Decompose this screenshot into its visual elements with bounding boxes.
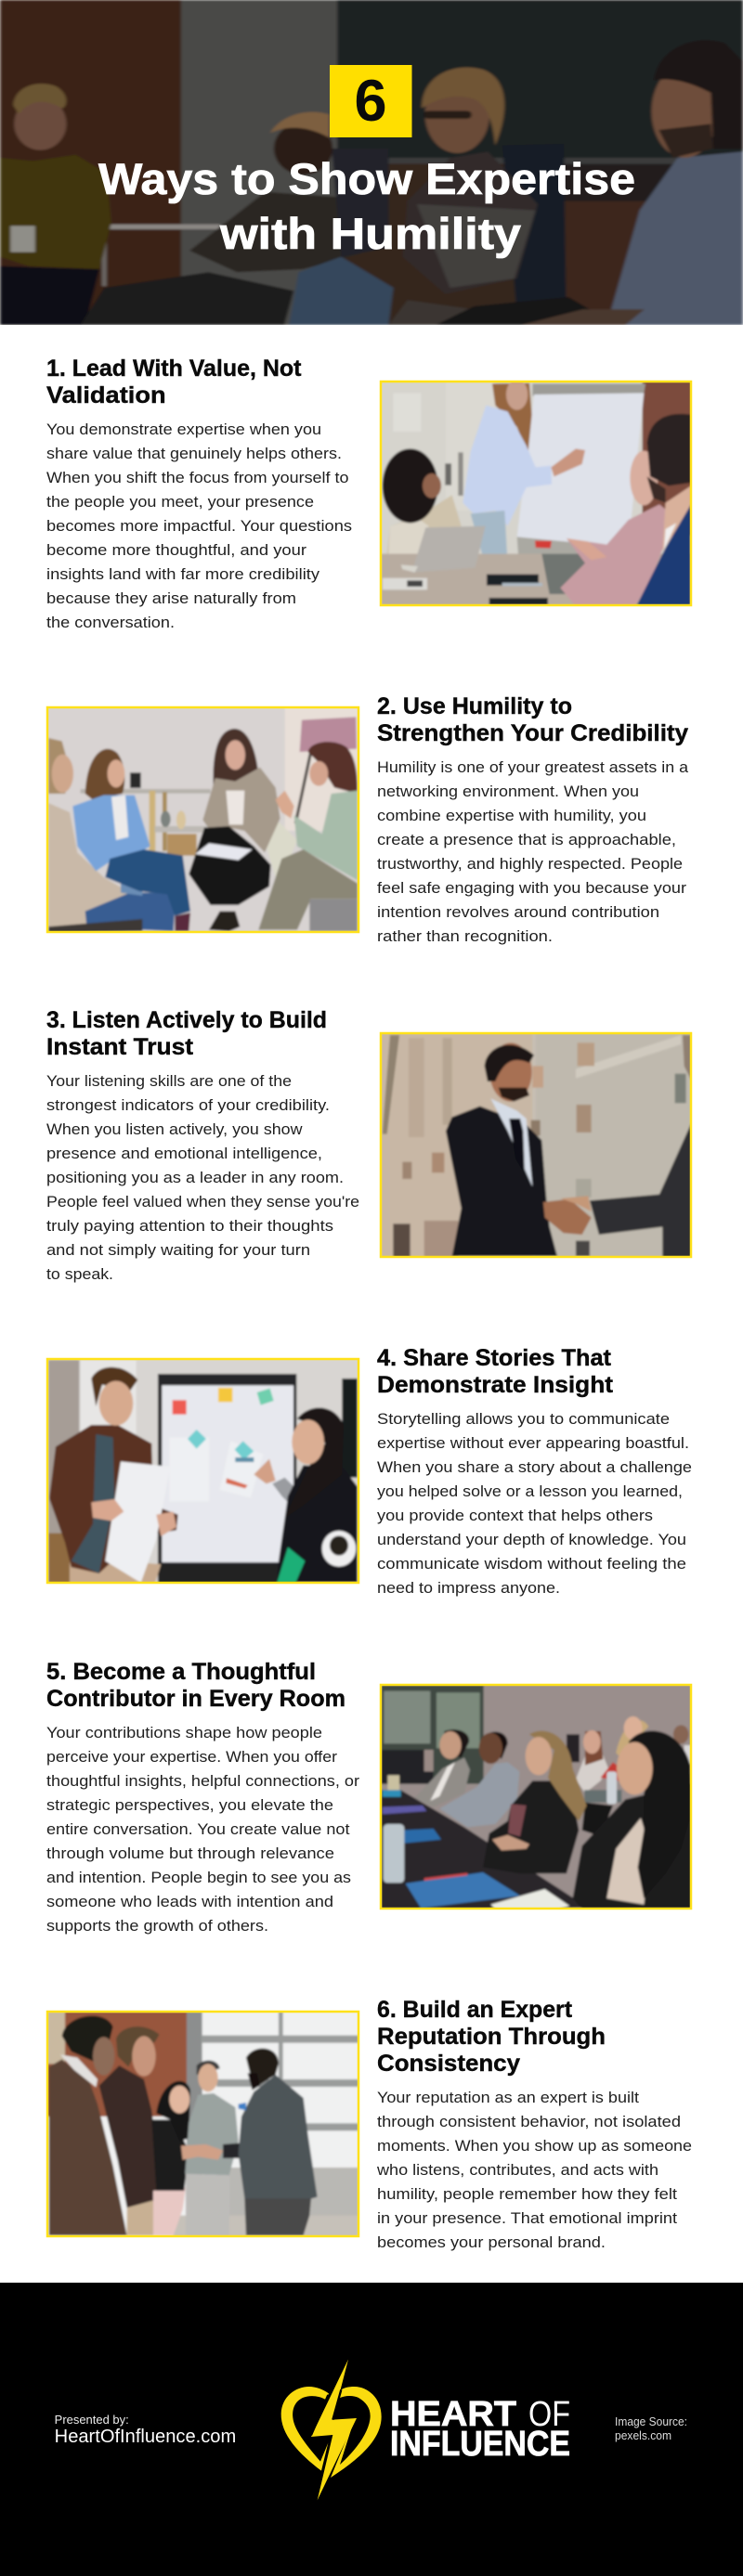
body text 4: you helped solve or a lesson you learned, <box>377 1482 683 1500</box>
heading 3: Instant Trust <box>46 1034 194 1060</box>
panel: section 1 <box>46 356 706 631</box>
body text 6: Your reputation as an expert is built <box>377 2089 639 2106</box>
heading 1: Validation <box>46 382 166 408</box>
body text 1: become more thoughtful, and your <box>46 541 306 559</box>
body text 5: supports the growth of others. <box>46 1917 268 1935</box>
body text 1: the conversation. <box>46 614 175 631</box>
body text 4: When you share a story about a challenge <box>377 1458 692 1476</box>
body text 3: truly paying attention to their thoughts <box>46 1217 333 1235</box>
body text 4: you provide context that helps others <box>377 1507 653 1524</box>
presented by credit: Presented by: <box>55 2414 129 2427</box>
photo 3: businessman handshake <box>372 1029 706 1264</box>
body text 3: When you listen actively, you show <box>46 1120 303 1138</box>
panel: footer <box>0 2283 743 2576</box>
body text 2 <box>377 758 689 945</box>
badge: number 6: 6 <box>354 69 387 134</box>
body text 3: and not simply waiting for your turn <box>46 1241 310 1259</box>
body text 2: combine expertise with humility, you <box>377 807 646 824</box>
body text 1: because they arise naturally from <box>46 589 296 607</box>
photo 5: seated conference audience <box>372 1682 706 1917</box>
body text 1: becomes more impactful. Your questions <box>46 517 352 535</box>
logo: heart with lightning bolt <box>281 2360 382 2500</box>
heading 6 <box>377 1997 606 2077</box>
logo wordmark <box>390 2395 570 2464</box>
body text 4: communicate wisdom without feeling the <box>377 1555 686 1573</box>
body text 1: the people you meet, your presence <box>46 493 314 511</box>
body text 5: perceive your expertise. When you offer <box>46 1748 337 1766</box>
body text 2: intention revolves around contribution <box>377 903 659 921</box>
heading 4: 4. Share Stories That <box>377 1345 612 1371</box>
panel: hero header <box>0 0 743 325</box>
photo 4: two people at a whiteboard with sticky notes <box>37 1357 372 1586</box>
body text 5: entire conversation. You create value not <box>46 1820 350 1838</box>
body text 5: someone who leads with intention and <box>46 1893 333 1910</box>
body text 2: Humility is one of your greatest assets in a <box>377 758 689 776</box>
image source credit: Image Source: <box>615 2415 687 2428</box>
heading 5: Contributor in Every Room <box>46 1686 345 1712</box>
body text 5 <box>46 1724 359 1935</box>
body text 6: who listens, contributes, and acts with <box>376 2161 658 2179</box>
logo wordmark: INFLUENCE <box>390 2425 570 2464</box>
body text 3: presence and emotional intelligence, <box>46 1145 322 1162</box>
body text 1: You demonstrate expertise when you <box>46 421 321 438</box>
body text 6: in your presence. That emotional imprint <box>377 2209 677 2227</box>
heading 2 <box>377 693 688 746</box>
body text 1: insights land with far more credibility <box>46 565 320 583</box>
logo wordmark: HEART <box>390 2395 516 2434</box>
title: with Humility <box>219 209 521 258</box>
heading 2: 2. Use Humility to <box>377 693 572 719</box>
body text 2: networking environment. When you <box>377 783 639 800</box>
body text 3: to speak. <box>46 1265 113 1283</box>
panel: section 3 <box>46 1007 706 1283</box>
body text 4: need to impress anyone. <box>377 1579 560 1597</box>
panel: section 6 <box>37 1997 692 2251</box>
presented by credit <box>55 2414 236 2447</box>
body text 1: share value that genuinely helps others. <box>46 445 342 462</box>
heading 4 <box>377 1345 614 1398</box>
heading 6: 6. Build an Expert <box>377 1997 573 2023</box>
presented by credit: HeartOfInfluence.com <box>55 2427 236 2447</box>
heading 1: 1. Lead With Value, Not <box>46 356 302 382</box>
body text 4: understand your depth of knowledge. You <box>377 1531 686 1548</box>
image source credit <box>615 2415 687 2442</box>
body text 2: create a presence that is approachable, <box>377 831 676 848</box>
body text 5: strategic perspectives, you elevate the <box>46 1796 333 1814</box>
panel: section 5 <box>46 1659 706 1935</box>
body text 3: strongest indicators of your credibility. <box>46 1096 330 1114</box>
body text 2: trustworthy, and highly respected. People <box>377 855 683 873</box>
heading 1 <box>46 356 302 408</box>
heading 5: 5. Become a Thoughtful <box>46 1659 316 1685</box>
body text 1 <box>46 421 352 631</box>
body text 5: through volume but through relevance <box>46 1845 334 1862</box>
photo 6: people shaking hands by a window <box>46 2011 360 2237</box>
heading 6: Consistency <box>377 2051 520 2077</box>
body text 2: feel safe engaging with you because your <box>377 879 686 897</box>
image source credit: pexels.com <box>615 2429 671 2442</box>
body text 3: People feel valued when they sense you're <box>46 1193 359 1210</box>
body text 5: thoughtful insights, helpful connections, or <box>46 1772 359 1790</box>
title: Ways to Show Expertise <box>98 154 635 203</box>
body text 3: Your listening skills are one of the <box>46 1072 292 1090</box>
badge: number 6 <box>330 65 412 137</box>
body text 4 <box>377 1410 692 1597</box>
heading 5 <box>46 1659 345 1712</box>
logo wordmark: OF <box>528 2395 570 2434</box>
body text 4: Storytelling allows you to communicate <box>377 1410 670 1428</box>
heading 4: Demonstrate Insight <box>377 1372 614 1398</box>
body text 6: moments. When you show up as someone <box>377 2137 692 2155</box>
panel: section 4 <box>37 1345 692 1597</box>
title <box>98 154 635 258</box>
heading 3 <box>46 1007 327 1060</box>
body text 5: and intention. People begin to see you as <box>46 1869 351 1886</box>
body text 6 <box>376 2089 692 2251</box>
body text 4: expertise without ever appearing boastful. <box>377 1434 689 1452</box>
body text 5: Your contributions shape how people <box>46 1724 322 1741</box>
hero background photo <box>0 0 743 325</box>
body text 6: humility, people remember how they felt <box>377 2185 677 2203</box>
body text 2: rather than recognition. <box>377 927 553 945</box>
heading 6: Reputation Through <box>377 2024 606 2050</box>
heading 2: Strengthen Your Credibility <box>377 720 688 746</box>
body text 3 <box>46 1072 359 1283</box>
heading 3: 3. Listen Actively to Build <box>46 1007 327 1033</box>
panel: section 2 <box>37 693 689 945</box>
body text 6: becomes your personal brand. <box>377 2233 606 2251</box>
body text 6: through consistent behavior, not isolated <box>377 2113 681 2130</box>
body text 1: When you shift the focus from yourself to <box>46 469 349 486</box>
photo 1: woman presenting at whiteboard <box>372 378 706 613</box>
photo 2: four people talking in a living room <box>37 704 372 939</box>
body text 3: positioning you as a leader in any room. <box>46 1169 344 1186</box>
